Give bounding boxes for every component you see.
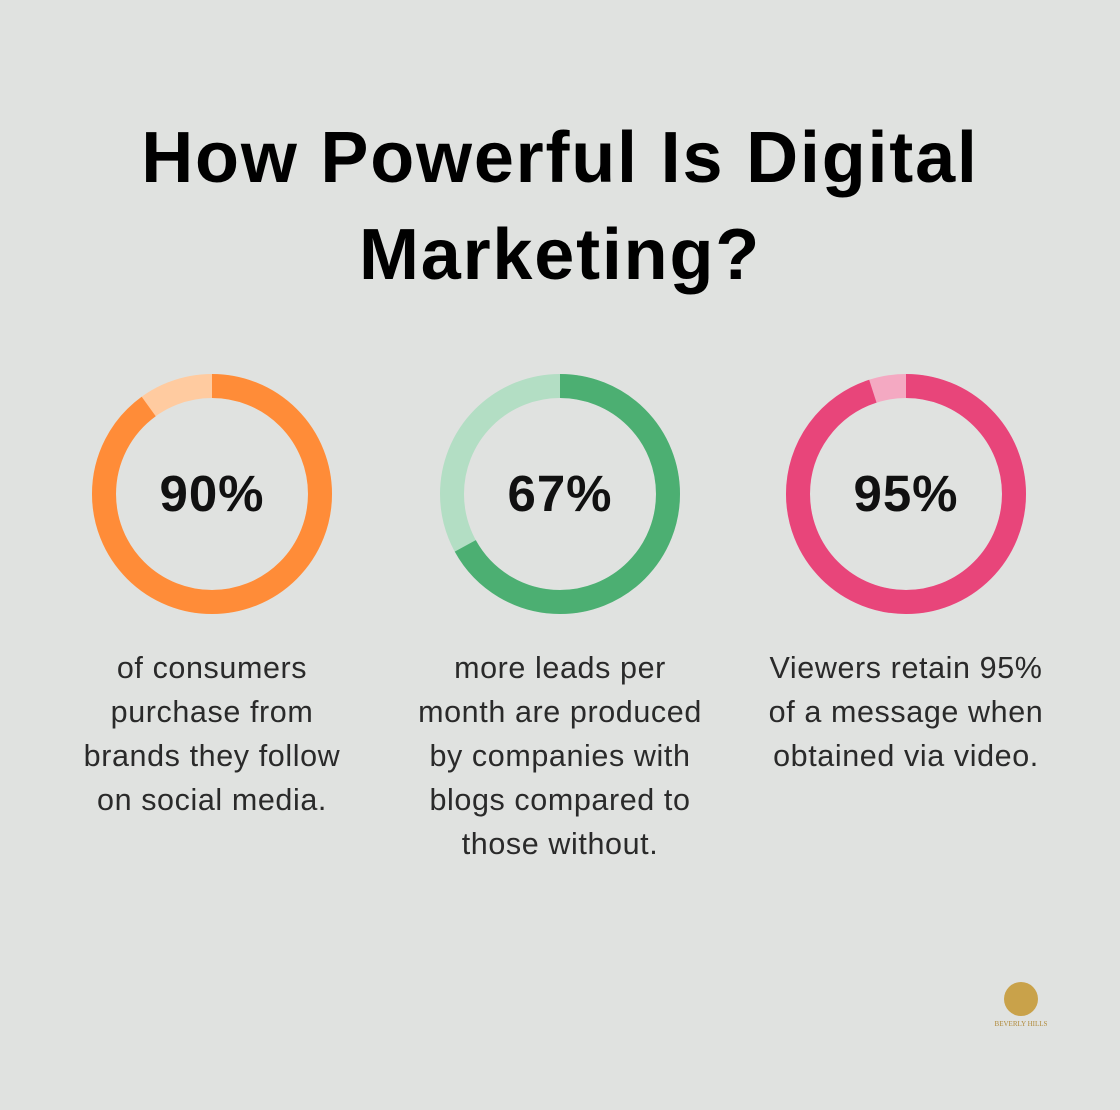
caption: 90%: of consumers xyxy=(117,651,307,685)
caption: 90% xyxy=(84,651,340,817)
caption: 95% xyxy=(769,651,1043,773)
title xyxy=(141,118,979,295)
caption: 95%: Viewers retain 95% xyxy=(769,651,1042,685)
caption: 67%: month are produced xyxy=(418,695,702,729)
donut: 95% xyxy=(786,374,1026,614)
caption: 95%: of a message when xyxy=(769,695,1043,729)
title: Marketing? xyxy=(359,215,761,295)
title: How Powerful Is Digital xyxy=(141,118,979,198)
caption: 90%: on social media. xyxy=(97,783,327,817)
donut: 67%: 67% xyxy=(507,465,613,522)
logo xyxy=(994,982,1047,1028)
donut: 90%: 90% xyxy=(159,465,265,522)
caption: 90%: brands they follow xyxy=(84,739,340,773)
donut: 67% xyxy=(440,374,680,614)
caption: 67%: those without. xyxy=(462,827,658,861)
caption: 90%: purchase from xyxy=(111,695,313,729)
donut: 95%: 95% xyxy=(853,465,959,522)
donut: 90% xyxy=(92,374,332,614)
logo: BEVERLY HILLS xyxy=(995,1020,1047,1028)
caption: 67%: blogs compared to xyxy=(429,783,691,817)
caption: 67%: by companies with xyxy=(429,739,691,773)
caption: 67% xyxy=(418,651,702,861)
caption: 95%: obtained via video. xyxy=(773,739,1039,773)
caption: 67%: more leads per xyxy=(454,651,666,685)
